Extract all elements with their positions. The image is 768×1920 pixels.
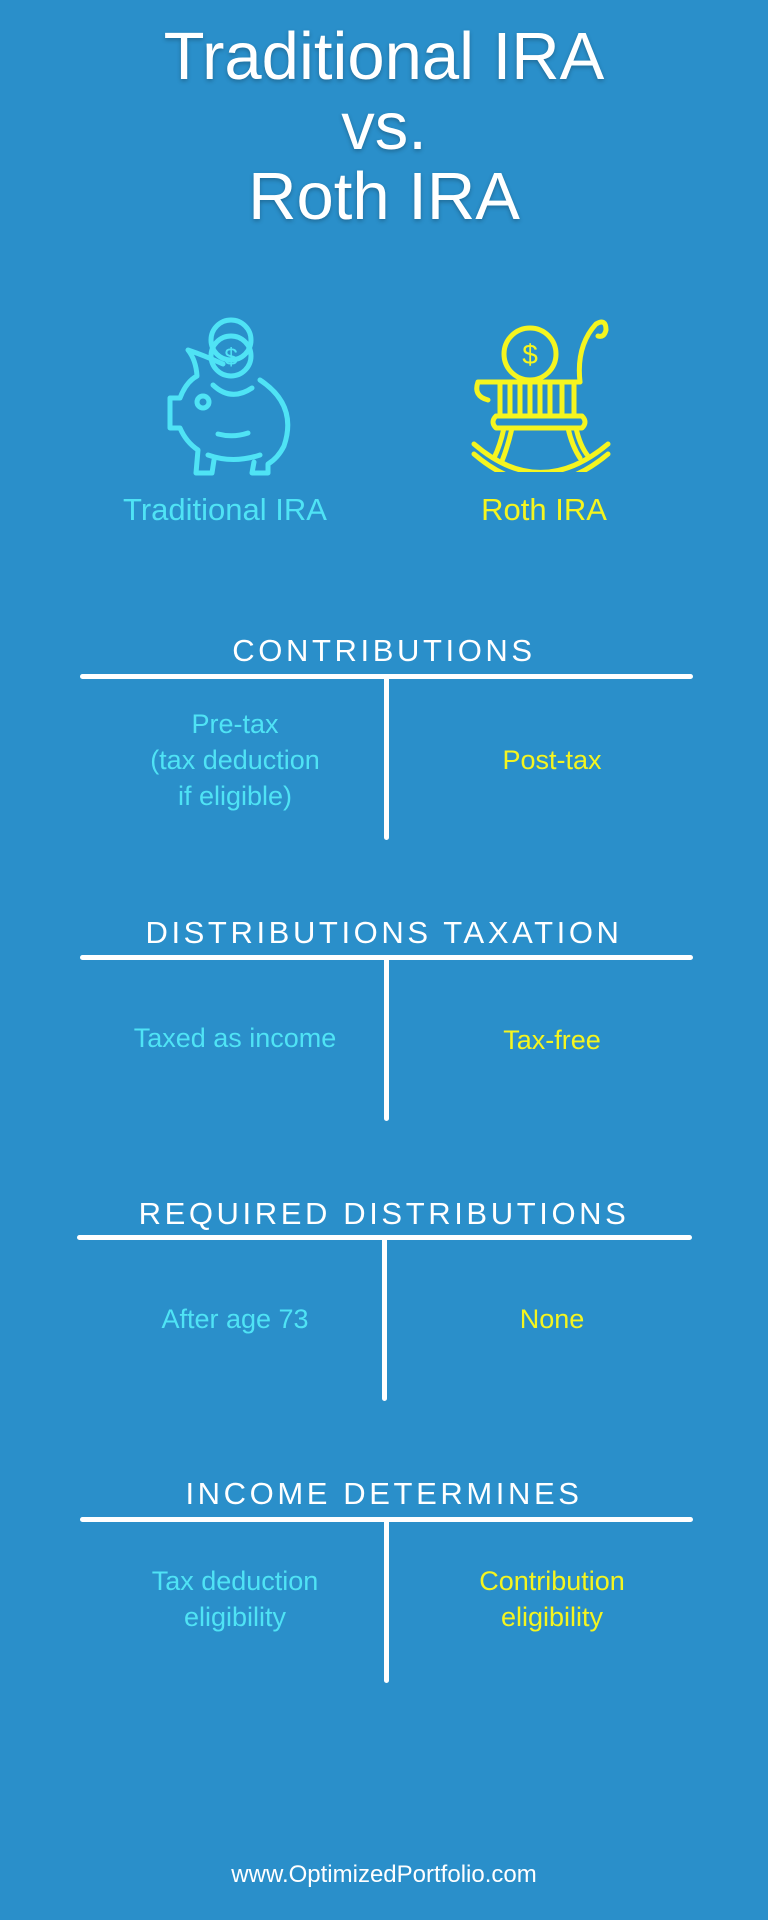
text: roth: eligibility [501,1602,603,1632]
heading: CONTRIBUTIONS [232,633,536,668]
title [164,19,605,234]
text: traditional: Tax deduction [152,1566,318,1596]
text: roth [479,1566,625,1632]
section: required distributions [77,1196,692,1401]
text: traditional: (tax deduction [150,745,320,775]
text: traditional: After age 73 [161,1304,309,1334]
heading: INCOME DETERMINES [185,1476,583,1511]
section: distributions taxation [80,915,693,1121]
icon: rocking chair: $ [522,339,538,370]
text: traditional: Pre-tax [191,709,279,739]
title: Traditional IRA [164,19,604,94]
text: roth: Post-tax [502,745,602,775]
text: roth: Contribution [479,1566,625,1596]
text: traditional [150,709,320,811]
text: roth: None [520,1304,584,1334]
text: traditional: eligibility [184,1602,286,1632]
label: Roth IRA: Roth IRA [481,492,607,527]
footer: www.OptimizedPortfolio.com [231,1861,537,1888]
text: roth: Tax-free [503,1025,601,1055]
text: traditional [152,1566,318,1632]
text: traditional: if eligible) [178,781,292,811]
heading: REQUIRED DISTRIBUTIONS [139,1196,629,1231]
section: contributions [80,633,693,840]
icon: piggy bank: $ [224,344,238,371]
text: traditional: Taxed as income [134,1023,336,1053]
icon: piggy bank [168,318,290,476]
title: Roth IRA [248,159,520,234]
icon: rocking chair [472,320,610,472]
label: Traditional IRA: Traditional IRA [123,492,327,527]
section: income determines [80,1476,693,1683]
heading: DISTRIBUTIONS TAXATION [145,915,623,950]
title: vs. [341,89,427,164]
